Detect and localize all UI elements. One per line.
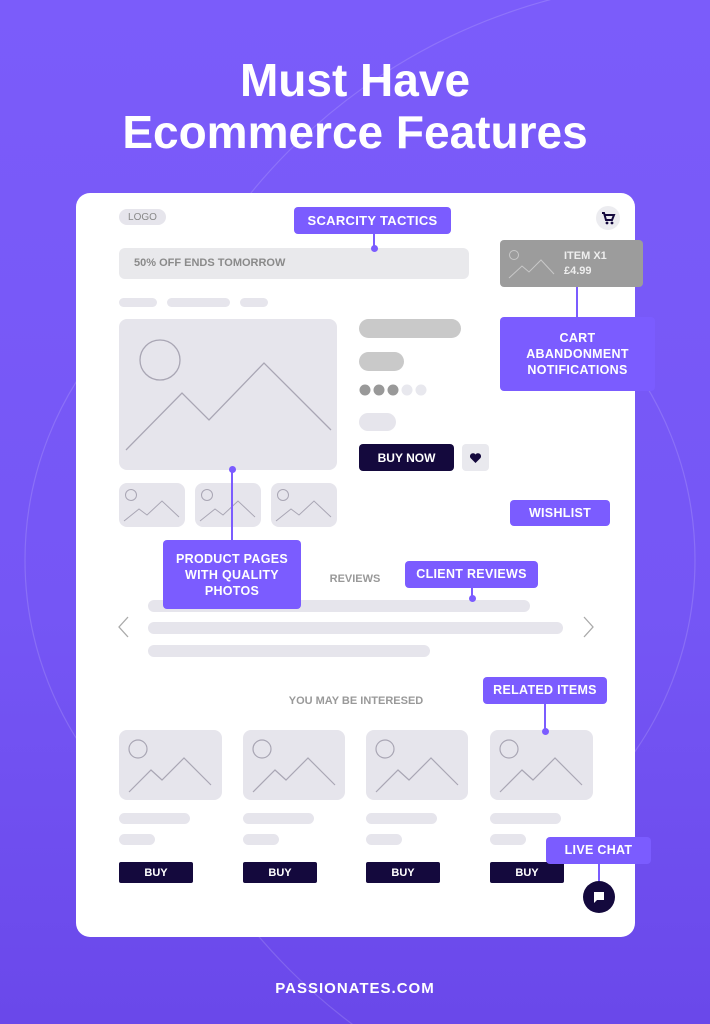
callout: cart abandonment: ABANDONMENT [526,347,629,361]
title: Must Have [240,54,470,106]
main product image [119,319,337,470]
related item cards: BUY [391,866,415,878]
buy now button [359,444,454,471]
callout: product pages: WITH QUALITY [185,568,279,582]
icon: chat [583,881,615,913]
related item cards: BUY [515,866,539,878]
callout: related items [483,677,607,735]
related item cards: BUY [144,866,168,878]
thumbnails [119,483,185,527]
callout: cart abandonment: CART [560,331,595,345]
callout: live chat: LIVE CHAT [565,843,632,857]
footer: PASSIONATES.COM [275,980,435,997]
logo: LOGO [128,212,157,222]
callout: product pages: PRODUCT PAGES [176,552,288,566]
callout: related items: RELATED ITEMS [493,683,597,697]
related item cards [119,730,593,883]
callout: product pages [163,466,301,609]
icon: cart [596,206,620,230]
rating dots [360,384,426,396]
callout: scarcity tactics: SCARCITY TACTICS [308,213,438,228]
related item cards: BUY [268,866,292,878]
reviews heading: REVIEWS [330,573,380,585]
callout: client reviews [405,561,538,602]
banner: 50% OFF ENDS TOMORROW [134,257,285,269]
buy now button: BUY NOW [378,450,435,464]
arrows [118,616,594,638]
banner [119,248,469,279]
callout: cart item tooltip [500,240,643,287]
callout: cart item tooltip: ITEM X1 [564,250,607,262]
logo [119,209,166,225]
callout: cart item tooltip: £4.99 [564,265,592,277]
panel: page mockup [76,193,635,937]
callout: wishlist: WISHLIST [529,506,591,520]
callout: wishlist [510,500,610,526]
callout: scarcity tactics [294,207,451,252]
title [122,54,588,158]
callout: cart abandonment [500,317,655,391]
callout: client reviews: CLIENT REVIEWS [416,567,527,581]
icon: heart [462,444,489,471]
related heading: YOU MAY BE INTERESED [289,695,423,707]
title: Ecommerce Features [122,106,588,158]
callout: product pages: PHOTOS [205,584,259,598]
callout: cart abandonment: NOTIFICATIONS [527,363,628,377]
